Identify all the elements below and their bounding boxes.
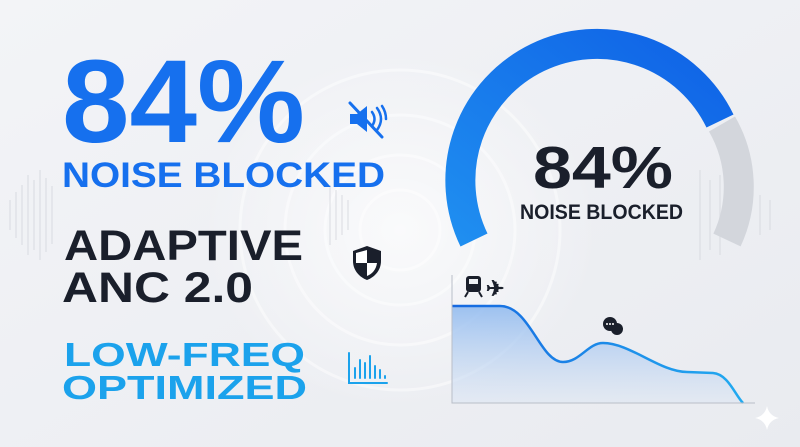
icon: bar chart: [349, 353, 387, 383]
icon: shield: [353, 246, 381, 280]
gauge: [460, 44, 739, 240]
icon: train: [465, 276, 482, 297]
text: low-freq optimized: [62, 336, 307, 406]
gauge label: NOISE BLOCKED: [520, 201, 683, 224]
subheading: noise blocked: NOISE BLOCKED: [62, 156, 385, 195]
icon: plane: ✈: [486, 276, 504, 301]
heading: 84%: 84%: [62, 36, 305, 168]
text: adaptive anc: [62, 222, 303, 312]
icon: sparkle: [755, 406, 779, 430]
text: low-freq optimized: LOW-FREQ: [64, 336, 305, 373]
text: adaptive anc: ANC 2.0: [62, 264, 253, 312]
icon: muted speaker: [350, 103, 386, 137]
text: low-freq optimized: OPTIMIZED: [62, 369, 307, 406]
text: adaptive anc: ADAPTIVE: [64, 222, 303, 270]
icon: chat bubbles: [603, 317, 623, 335]
chart: noise frequency curve: [452, 275, 755, 403]
gauge value: 84%: [533, 135, 673, 201]
